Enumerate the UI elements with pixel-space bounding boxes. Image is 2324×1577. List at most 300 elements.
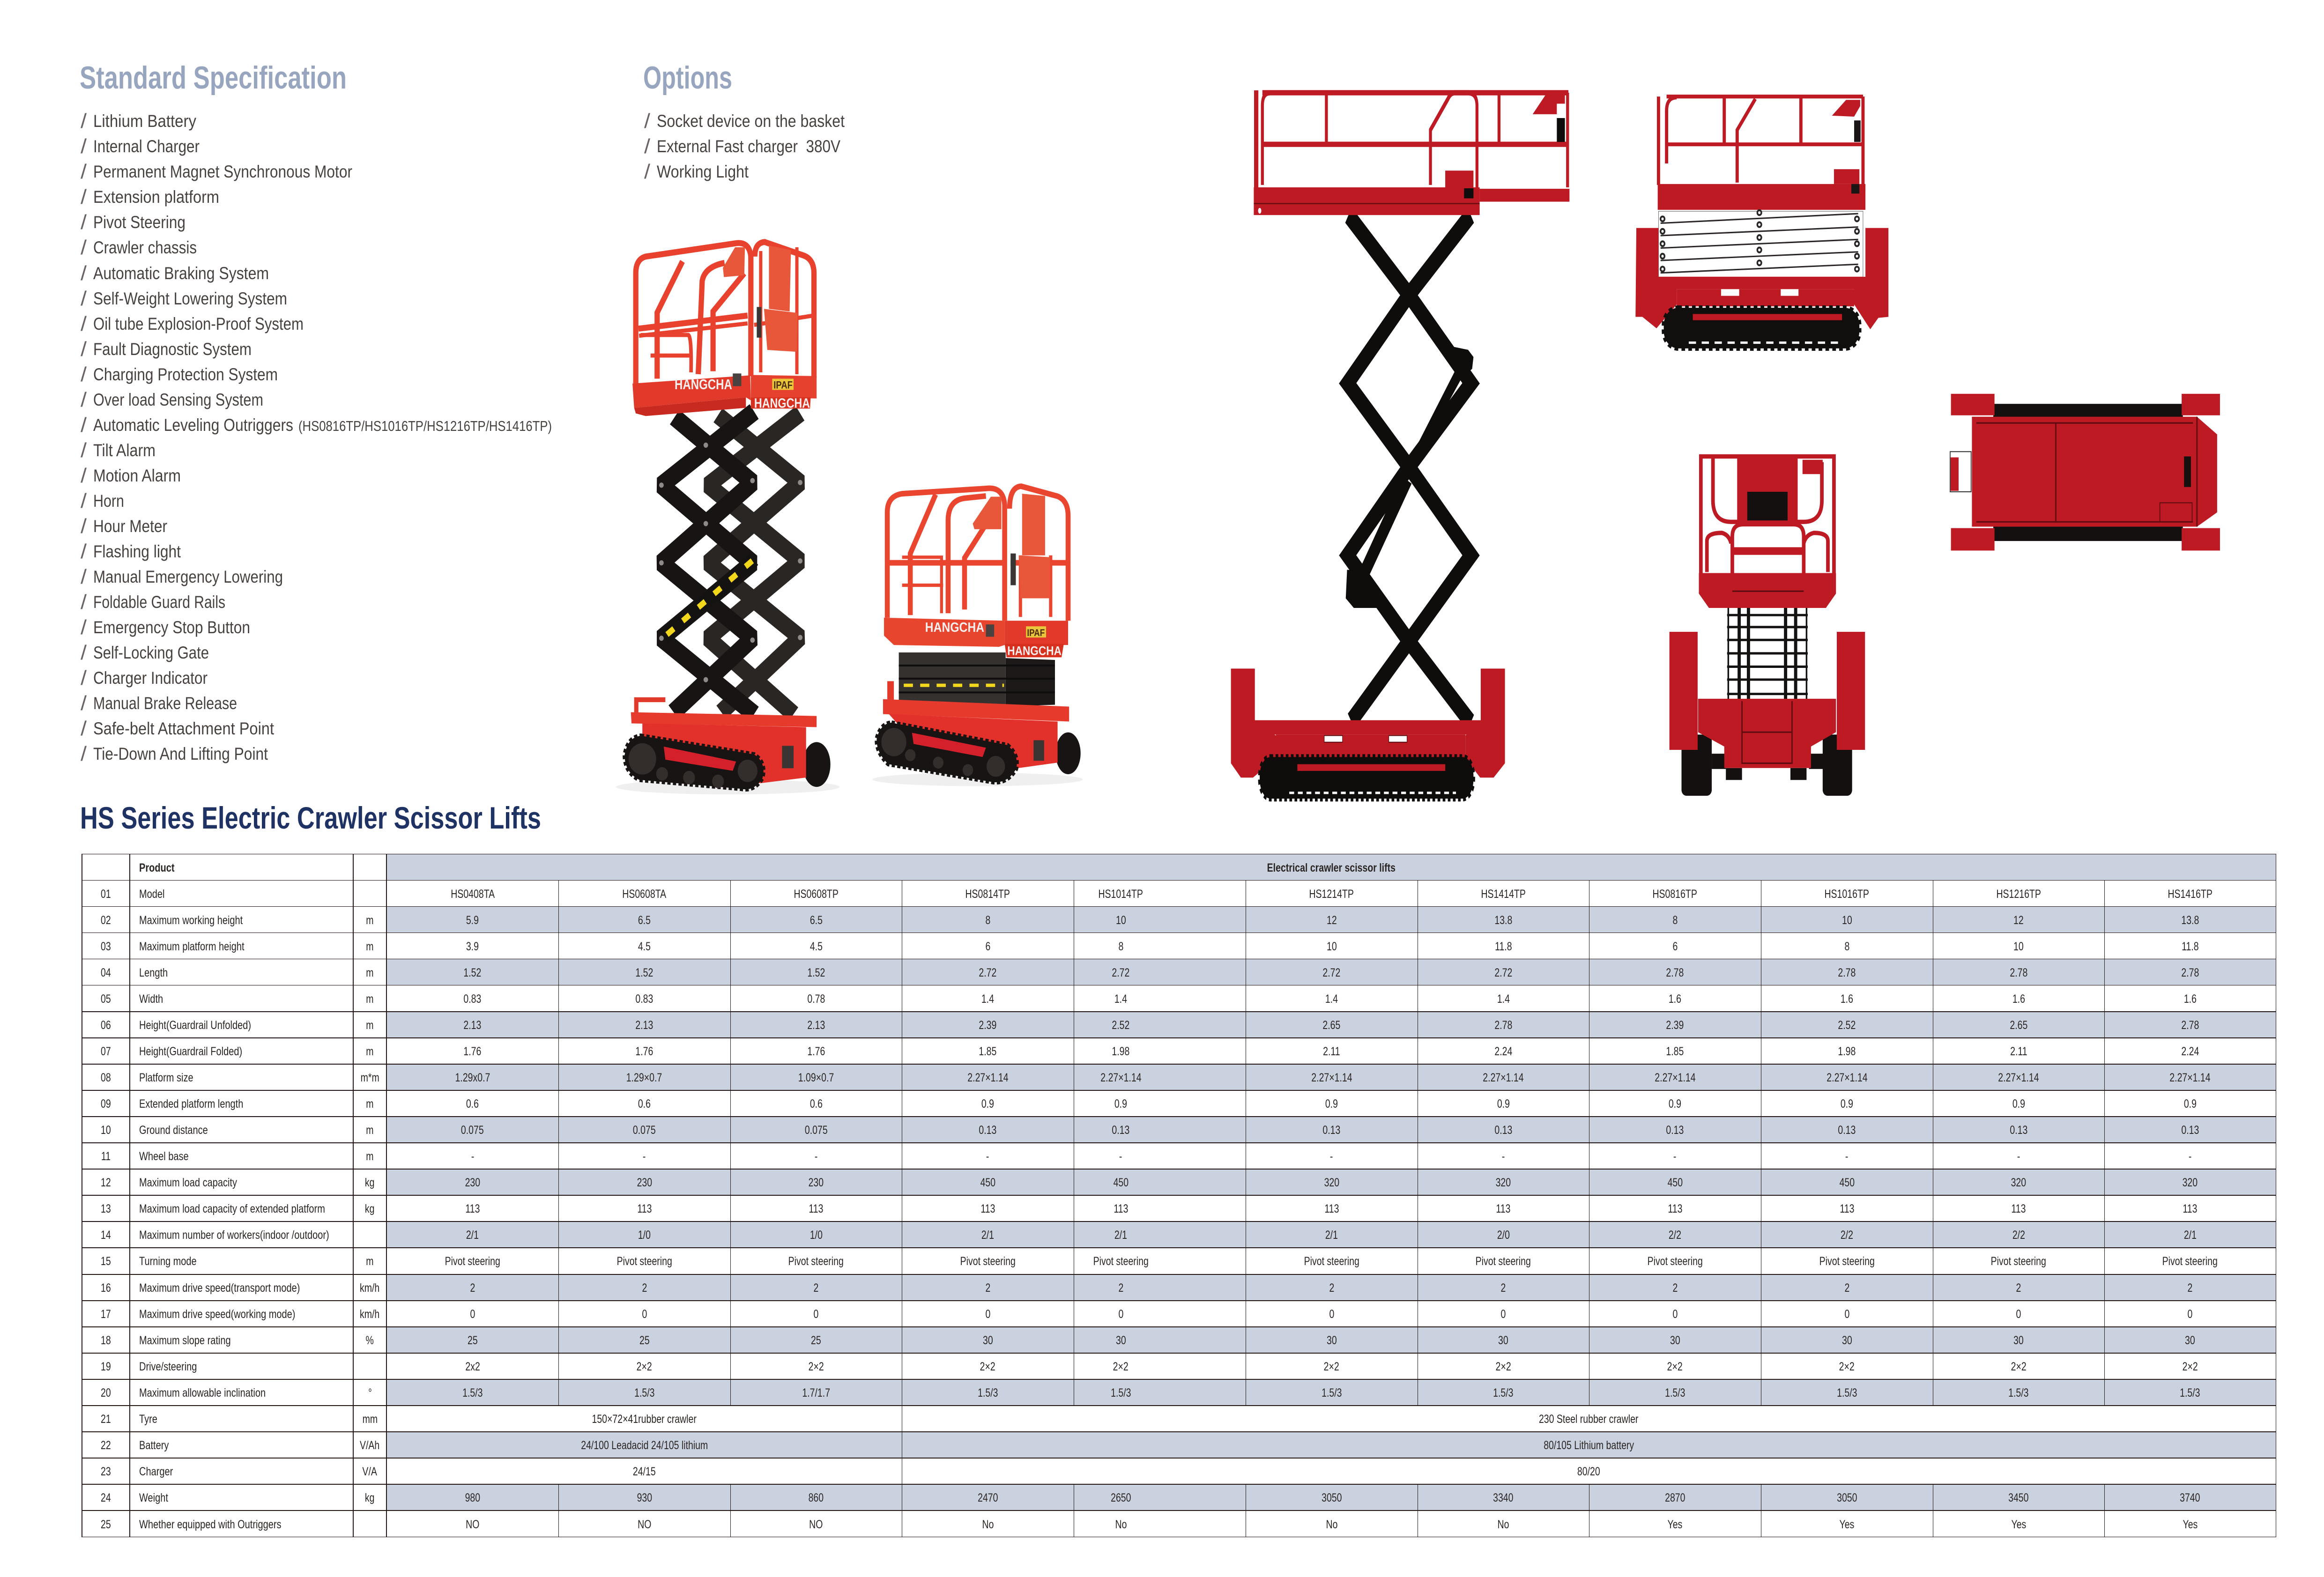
item: External Fast charger 380V: / <box>644 135 651 158</box>
row 20: Maximum allowable inclination: 1.5/3 <box>978 1386 998 1399</box>
row 20: Maximum allowable inclination: 1.5/3 <box>1493 1386 1514 1399</box>
row 07: Height (Guardrail Folded): m <box>366 1045 374 1058</box>
row 06: Height (Guardrail Unfolded): m <box>366 1019 374 1032</box>
outriggers and chassis <box>1635 228 1888 329</box>
row 09: Extended platform length: 0.9 <box>981 1097 994 1111</box>
row 05: Width: Width <box>139 992 163 1006</box>
row 24: Weight: 930 <box>637 1491 652 1504</box>
row 19: Drive/steering: 2x2 <box>465 1360 480 1373</box>
row 25: Whether equipped with Outriggers: 25 <box>101 1518 111 1531</box>
row 20: Maximum allowable inclination: Maximum allowable inclination <box>139 1386 266 1399</box>
row 12: Maximum load capacity: kg <box>365 1176 375 1189</box>
row 20: Maximum allowable inclination: 1.7/1.7 <box>802 1386 830 1399</box>
row 17: Maximum drive speed working <box>82 1301 2276 1327</box>
row 07: Height (Guardrail Folded): 1.85 <box>979 1045 996 1058</box>
item: Permanent Magnet Synchronous Motor: / <box>81 160 87 183</box>
item: Fault Diagnostic System: Fault Diagnostic System <box>93 340 252 359</box>
item: Tilt Alarm <box>81 439 156 462</box>
item: Permanent Magnet Synchronous Motor: Permanent Magnet Synchronous Motor <box>93 162 352 181</box>
row 16: Maximum drive speed transport: km/h <box>360 1281 380 1295</box>
drawing: end elevation <box>1670 456 1865 796</box>
item: Motion Alarm: / <box>81 464 87 487</box>
row 18: Maximum slope rating: 30 <box>2185 1334 2195 1347</box>
item: Working Light: / <box>644 160 651 183</box>
item: Hour Meter: Hour Meter <box>93 517 167 536</box>
row 18: Maximum slope rating: 25 <box>811 1334 821 1347</box>
row 24: Weight: 980 <box>465 1491 480 1504</box>
row 16: Maximum drive speed transport: 2 <box>1329 1281 1334 1295</box>
item: Charger Indicator <box>81 666 208 689</box>
item: Motion Alarm: Motion Alarm <box>93 466 181 485</box>
row 04: Length: 2.72 <box>1323 966 1340 979</box>
row 22: Battery: 24/100 Leadacid 24/105 lithium <box>581 1439 708 1452</box>
item: Extension platform <box>81 185 219 208</box>
row 03: Maximum platform height: 8 <box>1118 940 1123 953</box>
row 16: Maximum drive speed transport: 2 <box>2188 1281 2192 1295</box>
row 09: Extended platform length <box>82 1090 2276 1117</box>
row 07: Height (Guardrail Folded): 1.98 <box>1838 1045 1856 1058</box>
row 24: Weight: 2650 <box>1111 1491 1131 1504</box>
row 18: Maximum slope rating: 30 <box>1327 1334 1336 1347</box>
row 03: Maximum platform height: 4.5 <box>809 940 823 953</box>
row 06: Height (Guardrail Unfolded): 2.52 <box>1112 1019 1129 1032</box>
heading: Standard Specification: Standard Specification <box>80 60 347 96</box>
row 16: Maximum drive speed transport: 2 <box>1118 1281 1123 1295</box>
row 20: Maximum allowable inclination: ° <box>368 1386 371 1399</box>
row 07: Height (Guardrail Folded): 07 <box>101 1045 111 1058</box>
row 02: Maximum working height: 10 <box>1842 914 1852 927</box>
row 01: Model: HS1016TP <box>1825 888 1869 901</box>
badge: IPAF: IPAF <box>773 379 793 391</box>
row 25: Whether equipped with Outriggers: Yes <box>1840 1518 1854 1531</box>
row 22: Battery: Battery <box>139 1439 169 1452</box>
item: Over load Sensing System <box>81 388 263 411</box>
row 05: Width: 1.6 <box>2183 992 2197 1006</box>
row 20: Maximum allowable inclination: 20 <box>101 1386 111 1399</box>
item: Hour Meter: / <box>81 515 87 538</box>
folded scissor stack <box>899 652 1055 707</box>
row 01: Model: HS1214TP <box>1309 888 1354 901</box>
item: Emergency Stop Button <box>81 616 250 639</box>
item: Automatic Braking System: Automatic Braking System <box>93 264 269 283</box>
row 07: Height (Guardrail Folded): 1.76 <box>636 1045 653 1058</box>
row 13: Maximum load capacity of extended platform: 113 <box>1324 1202 1339 1215</box>
item: Flashing light <box>81 540 181 563</box>
row 01: Model: HS0608TP <box>794 888 839 901</box>
item: Oil tube Explosion-Proof System: / <box>81 312 87 335</box>
row 10: Ground distance: 0.075 <box>633 1124 656 1137</box>
scissor stack <box>1658 210 1863 278</box>
row 08: Platform size: m*m <box>360 1071 379 1084</box>
row 18: Maximum slope rating <box>82 1327 2276 1353</box>
row 20: Maximum allowable inclination: 1.5/3 <box>1665 1386 1685 1399</box>
logo: HANGCHA side: HANGCHA <box>1007 644 1062 658</box>
row 02: Maximum working height: 13.8 <box>1494 914 1512 927</box>
row 09: Extended platform length: 0.9 <box>1841 1097 1853 1111</box>
row 15: Turning mode: Pivot steering <box>2162 1255 2218 1268</box>
item: Internal Charger: / <box>81 135 87 158</box>
row 08: Platform size: 08 <box>101 1071 111 1084</box>
item: Automatic Braking System: / <box>81 262 87 285</box>
row 04: Length: 1.52 <box>807 966 825 979</box>
item: External Fast charger 380V: External Fast charger 380V <box>657 137 840 156</box>
row 10: Ground distance: 0.13 <box>1323 1124 1340 1137</box>
row 17: Maximum drive speed working: 0 <box>642 1308 647 1321</box>
row 04: Length: 2.72 <box>1112 966 1129 979</box>
row 02: Maximum working height: 12 <box>2013 914 2024 927</box>
row 14: Maximum number of workers: 2/1 <box>1114 1229 1127 1242</box>
row 03: Maximum platform height: 3.9 <box>466 940 479 953</box>
row 16: Maximum drive speed transport: 2 <box>470 1281 475 1295</box>
item: Internal Charger: Internal Charger <box>93 137 200 156</box>
item: Socket device on the basket: Socket device on the basket <box>657 111 845 131</box>
row 25: Whether equipped with Outriggers: No <box>1115 1518 1127 1531</box>
row 21: Tyre: Tyre <box>139 1413 157 1426</box>
row 20: Maximum allowable inclination <box>82 1379 2276 1406</box>
row 14: Maximum number of workers: 1/0 <box>809 1229 823 1242</box>
item: Pivot Steering: / <box>81 211 87 234</box>
row 02: Maximum working height <box>82 907 2276 933</box>
row 02: Maximum working height: 8 <box>985 914 990 927</box>
item: Fault Diagnostic System <box>81 338 252 361</box>
heading: HS Series Electric Crawler Scissor Lifts: HS Series Electric Crawler Scissor Lifts <box>80 800 541 835</box>
logo: HANGCHA: HANGCHA <box>925 620 984 635</box>
chassis <box>887 681 894 701</box>
row 12: Maximum load capacity: 230 <box>637 1176 652 1189</box>
row 02: Maximum working height: 6.5 <box>638 914 651 927</box>
outriggers and chassis <box>1231 669 1505 777</box>
row 24: Weight: 3050 <box>1322 1491 1342 1504</box>
row 12: Maximum load capacity: 320 <box>2183 1176 2198 1189</box>
item: Foldable Guard Rails <box>81 591 225 614</box>
row 12: Maximum load capacity: 450 <box>1113 1176 1129 1189</box>
badge: IPAF: IPAF <box>1027 628 1045 638</box>
row 13: Maximum load capacity of extended platform: 113 <box>2183 1202 2198 1215</box>
row 23: Charger: 23 <box>101 1465 111 1478</box>
row 05: Width: 1.4 <box>1114 992 1127 1006</box>
row 13: Maximum load capacity of extended platform: Maximum load capacity of extended platform <box>139 1202 325 1215</box>
row 21: Tyre: 21 <box>101 1413 111 1426</box>
row 04: Length: Length <box>139 966 168 979</box>
item: Foldable Guard Rails: Foldable Guard Rails <box>93 592 225 612</box>
item: Tilt Alarm: Tilt Alarm <box>93 441 156 460</box>
row 18: Maximum slope rating: 30 <box>1842 1334 1852 1347</box>
row 24: Weight: 3050 <box>1837 1491 1857 1504</box>
row 14: Maximum number of workers: Maximum number of workers(indoor /outdoor) <box>139 1229 329 1242</box>
row 04: Length: m <box>366 966 374 979</box>
row 09: Extended platform length: 0.9 <box>1669 1097 1681 1111</box>
row 09: Extended platform length: Extended platform length <box>139 1097 243 1111</box>
row 11: Wheel base: - <box>1845 1150 1849 1163</box>
row 12: Maximum load capacity: 320 <box>1324 1176 1339 1189</box>
scissor arms <box>1348 215 1471 723</box>
row 20: Maximum allowable inclination: 1.5/3 <box>634 1386 654 1399</box>
row 18: Maximum slope rating: 18 <box>101 1334 111 1347</box>
row 20: Maximum allowable inclination: 1.5/3 <box>1837 1386 1857 1399</box>
row 15: Turning mode: Pivot steering <box>1304 1255 1359 1268</box>
guard rails <box>1262 93 1568 187</box>
row 17: Maximum drive speed working: 0 <box>1329 1308 1334 1321</box>
row 07: Height (Guardrail Folded): 1.76 <box>807 1045 825 1058</box>
row 04: Length: 04 <box>101 966 111 979</box>
item: Extension platform: / <box>81 185 87 208</box>
basket panels <box>723 245 797 352</box>
item: Automatic Braking System <box>81 262 269 285</box>
row 08: Platform size: 1.09×0.7 <box>798 1071 834 1084</box>
row 10: Ground distance: 0.13 <box>1112 1124 1129 1137</box>
row 14: Maximum number of workers: 2/1 <box>2183 1229 2197 1242</box>
row 12: Maximum load capacity: Maximum load capacity <box>139 1176 237 1189</box>
row 14: Maximum number of workers: 2/0 <box>1497 1229 1510 1242</box>
item: Pivot Steering <box>81 211 186 234</box>
row 13: Maximum load capacity of extended platform: kg <box>365 1202 375 1215</box>
item: Manual Emergency Lowering <box>81 565 283 588</box>
drawing: top plan view <box>1950 394 2220 551</box>
row 07: Height (Guardrail Folded): 2.24 <box>2181 1045 2199 1058</box>
row 07: Height (Guardrail Folded): 1.85 <box>1666 1045 1684 1058</box>
row 12: Maximum load capacity: 230 <box>465 1176 480 1189</box>
item: Emergency Stop Button: / <box>81 616 87 639</box>
item: Working Light <box>644 160 749 183</box>
item: Manual Emergency Lowering: / <box>81 565 87 588</box>
row 15: Turning mode: Pivot steering <box>445 1255 500 1268</box>
row 11: Wheel base: 11 <box>101 1150 111 1163</box>
row 08: Platform size: 1.29x0.7 <box>455 1071 490 1084</box>
row 02: Maximum working height: 6.5 <box>809 914 823 927</box>
item: Extension platform: Extension platform <box>93 187 219 207</box>
row 19: Drive/steering: 2×2 <box>2011 1360 2027 1373</box>
row 05: Width: m <box>366 992 374 1006</box>
row 01: Model <box>82 881 2276 907</box>
row 08: Platform size: 2.27×1.14 <box>1311 1071 1352 1084</box>
row 02: Maximum working height: 5.9 <box>466 914 479 927</box>
crawler tracks <box>1681 734 1852 796</box>
row 19: Drive/steering: 2×2 <box>1667 1360 1683 1373</box>
item: Automatic Leveling Outriggers: Automatic Leveling Outriggers <box>93 415 293 435</box>
row: header: Product <box>139 861 175 874</box>
row 10: Ground distance: 0.13 <box>2181 1124 2199 1137</box>
item: Tilt Alarm: / <box>81 439 87 462</box>
row 15: Turning mode: Pivot steering <box>1476 1255 1531 1268</box>
row 12: Maximum load capacity: 450 <box>1839 1176 1855 1189</box>
row 25: Whether equipped with Outriggers: NO <box>466 1518 479 1531</box>
drawing: side elevation stowed <box>1635 96 1888 348</box>
item: Flashing light: / <box>81 540 87 563</box>
guard rails <box>1658 96 1863 185</box>
row 14: Maximum number of workers: 2/1 <box>981 1229 994 1242</box>
item: Over load Sensing System: / <box>81 388 87 411</box>
platform deck <box>1254 187 1569 215</box>
crawler track <box>876 723 1017 782</box>
item: Motion Alarm <box>81 464 181 487</box>
row 10: Ground distance: Ground distance <box>139 1124 208 1137</box>
row 09: Extended platform length: 0.6 <box>466 1097 479 1111</box>
item: Self-Locking Gate: Self-Locking Gate <box>93 643 209 662</box>
row 25: Whether equipped with Outriggers: No <box>982 1518 994 1531</box>
row 09: Extended platform length: 0.6 <box>809 1097 823 1111</box>
row 06: Height (Guardrail Unfolded): Height(Guardrail Unfolded) <box>139 1019 251 1032</box>
item: Manual Emergency Lowering: Manual Emergency Lowering <box>93 567 283 586</box>
row 25: Whether equipped with Outriggers: No <box>1498 1518 1509 1531</box>
item: Working Light: Working Light <box>657 162 749 181</box>
ladder step <box>1950 452 1971 492</box>
item: Flashing light: Flashing light <box>93 542 181 561</box>
row: header: Electrical crawler scissor lifts <box>1267 861 1396 874</box>
row 08: Platform size: 2.27×1.14 <box>2169 1071 2211 1084</box>
row 06: Height (Guardrail Unfolded): 2.78 <box>1494 1019 1512 1032</box>
row 17: Maximum drive speed working: 0 <box>1844 1308 1849 1321</box>
row 01: Model: HS0408TA <box>451 888 495 901</box>
row 11: Wheel base: - <box>1330 1150 1333 1163</box>
item: Charging Protection System <box>81 363 278 386</box>
row 04: Length: 2.78 <box>1838 966 1856 979</box>
row 06: Height (Guardrail Unfolded): 2.65 <box>2010 1019 2027 1032</box>
row 18: Maximum slope rating: 25 <box>468 1334 478 1347</box>
item: Horn: Horn <box>93 491 124 511</box>
row 09: Extended platform length: m <box>366 1097 374 1111</box>
row 11: Wheel base: - <box>1502 1150 1505 1163</box>
row 20: Maximum allowable inclination: 1.5/3 <box>2008 1386 2029 1399</box>
row 10: Ground distance: 0.075 <box>461 1124 484 1137</box>
row 01: Model: HS1014TP <box>1099 888 1143 901</box>
row 06: Height (Guardrail Unfolded): 2.78 <box>2181 1019 2199 1032</box>
row 04: Length: 2.78 <box>2181 966 2199 979</box>
row 06: Height (Guardrail Unfolded): 2.39 <box>1666 1019 1684 1032</box>
row 20: Maximum allowable inclination: 1.5/3 <box>2180 1386 2200 1399</box>
row 13: Maximum load capacity of extended platform: 113 <box>637 1202 652 1215</box>
row 16: Maximum drive speed transport: 2 <box>642 1281 647 1295</box>
row 10: Ground distance: 0.13 <box>979 1124 996 1137</box>
item: Self-Locking Gate <box>81 641 209 664</box>
row 07: Height (Guardrail Folded): 1.98 <box>1112 1045 1129 1058</box>
row 03: Maximum platform height: 10 <box>1327 940 1336 953</box>
row 01: Model: HS0816TP <box>1653 888 1697 901</box>
row 12: Maximum load capacity: 320 <box>2011 1176 2026 1189</box>
row 15: Turning mode: Turning mode <box>139 1255 197 1268</box>
row 20: Maximum allowable inclination: 1.5/3 <box>1322 1386 1342 1399</box>
row 17: Maximum drive speed working: km/h <box>360 1308 380 1321</box>
row 19: Drive/steering: 2×2 <box>1839 1360 1855 1373</box>
row 09: Extended platform length: 0.9 <box>2183 1097 2197 1111</box>
row 13: Maximum load capacity of extended platform: 113 <box>2011 1202 2026 1215</box>
row 25: Whether equipped with Outriggers: Whether equipped with Outriggers <box>139 1518 281 1531</box>
row 03: Maximum platform height: Maximum platform height <box>139 940 245 953</box>
row 17: Maximum drive speed working: Maximum drive speed(working mode) <box>139 1308 295 1321</box>
row 08: Platform size: 1.29×0.7 <box>626 1071 662 1084</box>
row 13: Maximum load capacity of extended platform: 113 <box>1114 1202 1128 1215</box>
row 21: Tyre: 230 Steel rubber crawler <box>1539 1413 1639 1426</box>
row 04: Length: 2.72 <box>979 966 996 979</box>
row 25: Whether equipped with Outriggers: Yes <box>2011 1518 2026 1531</box>
row 16: Maximum drive speed transport: 2 <box>985 1281 990 1295</box>
row 19: Drive/steering: 2×2 <box>1324 1360 1339 1373</box>
row 14: Maximum number of workers: 2/1 <box>1325 1229 1338 1242</box>
row 06: Height (Guardrail Unfolded): 2.13 <box>464 1019 482 1032</box>
row 03: Maximum platform height: 6 <box>1672 940 1678 953</box>
row 12: Maximum load capacity: 12 <box>101 1176 111 1189</box>
row 11: Wheel base: - <box>471 1150 474 1163</box>
row 06: Height (Guardrail Unfolded): 06 <box>101 1019 111 1032</box>
item: Charger Indicator: / <box>81 666 87 689</box>
row 06: Height (Guardrail Unfolded) <box>82 1012 2276 1038</box>
row 12: Maximum load capacity: 230 <box>809 1176 824 1189</box>
row 10: Ground distance: 10 <box>101 1124 111 1137</box>
row 10: Ground distance: 0.13 <box>1494 1124 1512 1137</box>
item: Automatic Leveling Outriggers: / <box>81 414 87 437</box>
photo: raised scissor lift <box>616 242 839 794</box>
row 19: Drive/steering: 2×2 <box>1495 1360 1511 1373</box>
crawler track <box>624 736 764 789</box>
row 05: Width: 1.6 <box>2012 992 2025 1006</box>
row 25: Whether equipped with Outriggers: Yes <box>2183 1518 2198 1531</box>
row 07: Height (Guardrail Folded): Height(Guardrail Folded) <box>139 1045 242 1058</box>
row 06: Height (Guardrail Unfolded): 2.13 <box>636 1019 653 1032</box>
row 06: Height (Guardrail Unfolded): 2.65 <box>1323 1019 1340 1032</box>
row 22: Battery: V/Ah <box>360 1439 380 1452</box>
row 16: Maximum drive speed transport: 2 <box>1844 1281 1849 1295</box>
crawler track <box>1664 308 1859 348</box>
row 01: Model: 01 <box>101 888 111 901</box>
row 14: Maximum number of workers: 1/0 <box>638 1229 651 1242</box>
row 23: Charger: 24/15 <box>633 1465 656 1478</box>
row 02: Maximum working height: 10 <box>1116 914 1126 927</box>
row 19: Drive/steering: 2×2 <box>2182 1360 2198 1373</box>
row 17: Maximum drive speed working: 0 <box>1501 1308 1506 1321</box>
row 08: Platform size: 2.27×1.14 <box>1100 1071 1141 1084</box>
item: Safe-belt Attachment Point: / <box>81 717 87 740</box>
row 24: Weight: kg <box>365 1491 375 1504</box>
row 19: Drive/steering: 2×2 <box>1113 1360 1129 1373</box>
item: Oil tube Explosion-Proof System: Oil tube Explosion-Proof System <box>93 314 304 333</box>
row 17: Maximum drive speed working: 0 <box>2016 1308 2021 1321</box>
row 16: Maximum drive speed transport: 2 <box>1501 1281 1506 1295</box>
item: Charger Indicator: Charger Indicator <box>93 668 208 688</box>
row 24: Weight: 3450 <box>2008 1491 2029 1504</box>
item: Tie-Down And Lifting Point: Tie-Down And Lifting Point <box>93 744 268 763</box>
row 07: Height (Guardrail Folded): 1.76 <box>464 1045 482 1058</box>
row 03: Maximum platform height: m <box>366 940 374 953</box>
row 06: Height (Guardrail Unfolded): 2.52 <box>1838 1019 1856 1032</box>
hazard strip <box>664 559 754 637</box>
row 07: Height (Guardrail Folded): 2.24 <box>1494 1045 1512 1058</box>
item: Over load Sensing System: Over load Sensing System <box>93 390 263 409</box>
item: Oil tube Explosion-Proof System <box>81 312 304 335</box>
row 05: Width: 0.83 <box>464 992 482 1006</box>
item: Crawler chassis <box>81 236 197 259</box>
outriggers and chassis <box>1670 632 1865 768</box>
row 10: Ground distance: 0.13 <box>1666 1124 1684 1137</box>
row 23: Charger <box>82 1458 2276 1484</box>
row 14: Maximum number of workers: 2/2 <box>2012 1229 2025 1242</box>
row 07: Height (Guardrail Folded) <box>82 1038 2276 1064</box>
row 11: Wheel base: - <box>815 1150 817 1163</box>
row 07: Height (Guardrail Folded): 2.11 <box>1323 1045 1340 1058</box>
platform <box>1699 573 1836 608</box>
row 09: Extended platform length: 0.6 <box>638 1097 651 1111</box>
row 12: Maximum load capacity: 450 <box>1667 1176 1683 1189</box>
item: Lithium Battery: / <box>81 110 87 133</box>
item: Manual Brake Release: Manual Brake Release <box>93 694 237 713</box>
platform deck <box>1658 184 1865 210</box>
row 01: Model: HS0814TP <box>965 888 1010 901</box>
row 03: Maximum platform height: 11.8 <box>1495 940 1512 953</box>
row 05: Width: 1.4 <box>1497 992 1510 1006</box>
row 08: Platform size: 2.27×1.14 <box>1827 1071 1867 1084</box>
row 12: Maximum load capacity <box>82 1169 2276 1195</box>
heading: Options: Options <box>643 60 732 96</box>
row 06: Height (Guardrail Unfolded): 2.13 <box>807 1019 825 1032</box>
row 10: Ground distance: 0.13 <box>2010 1124 2027 1137</box>
